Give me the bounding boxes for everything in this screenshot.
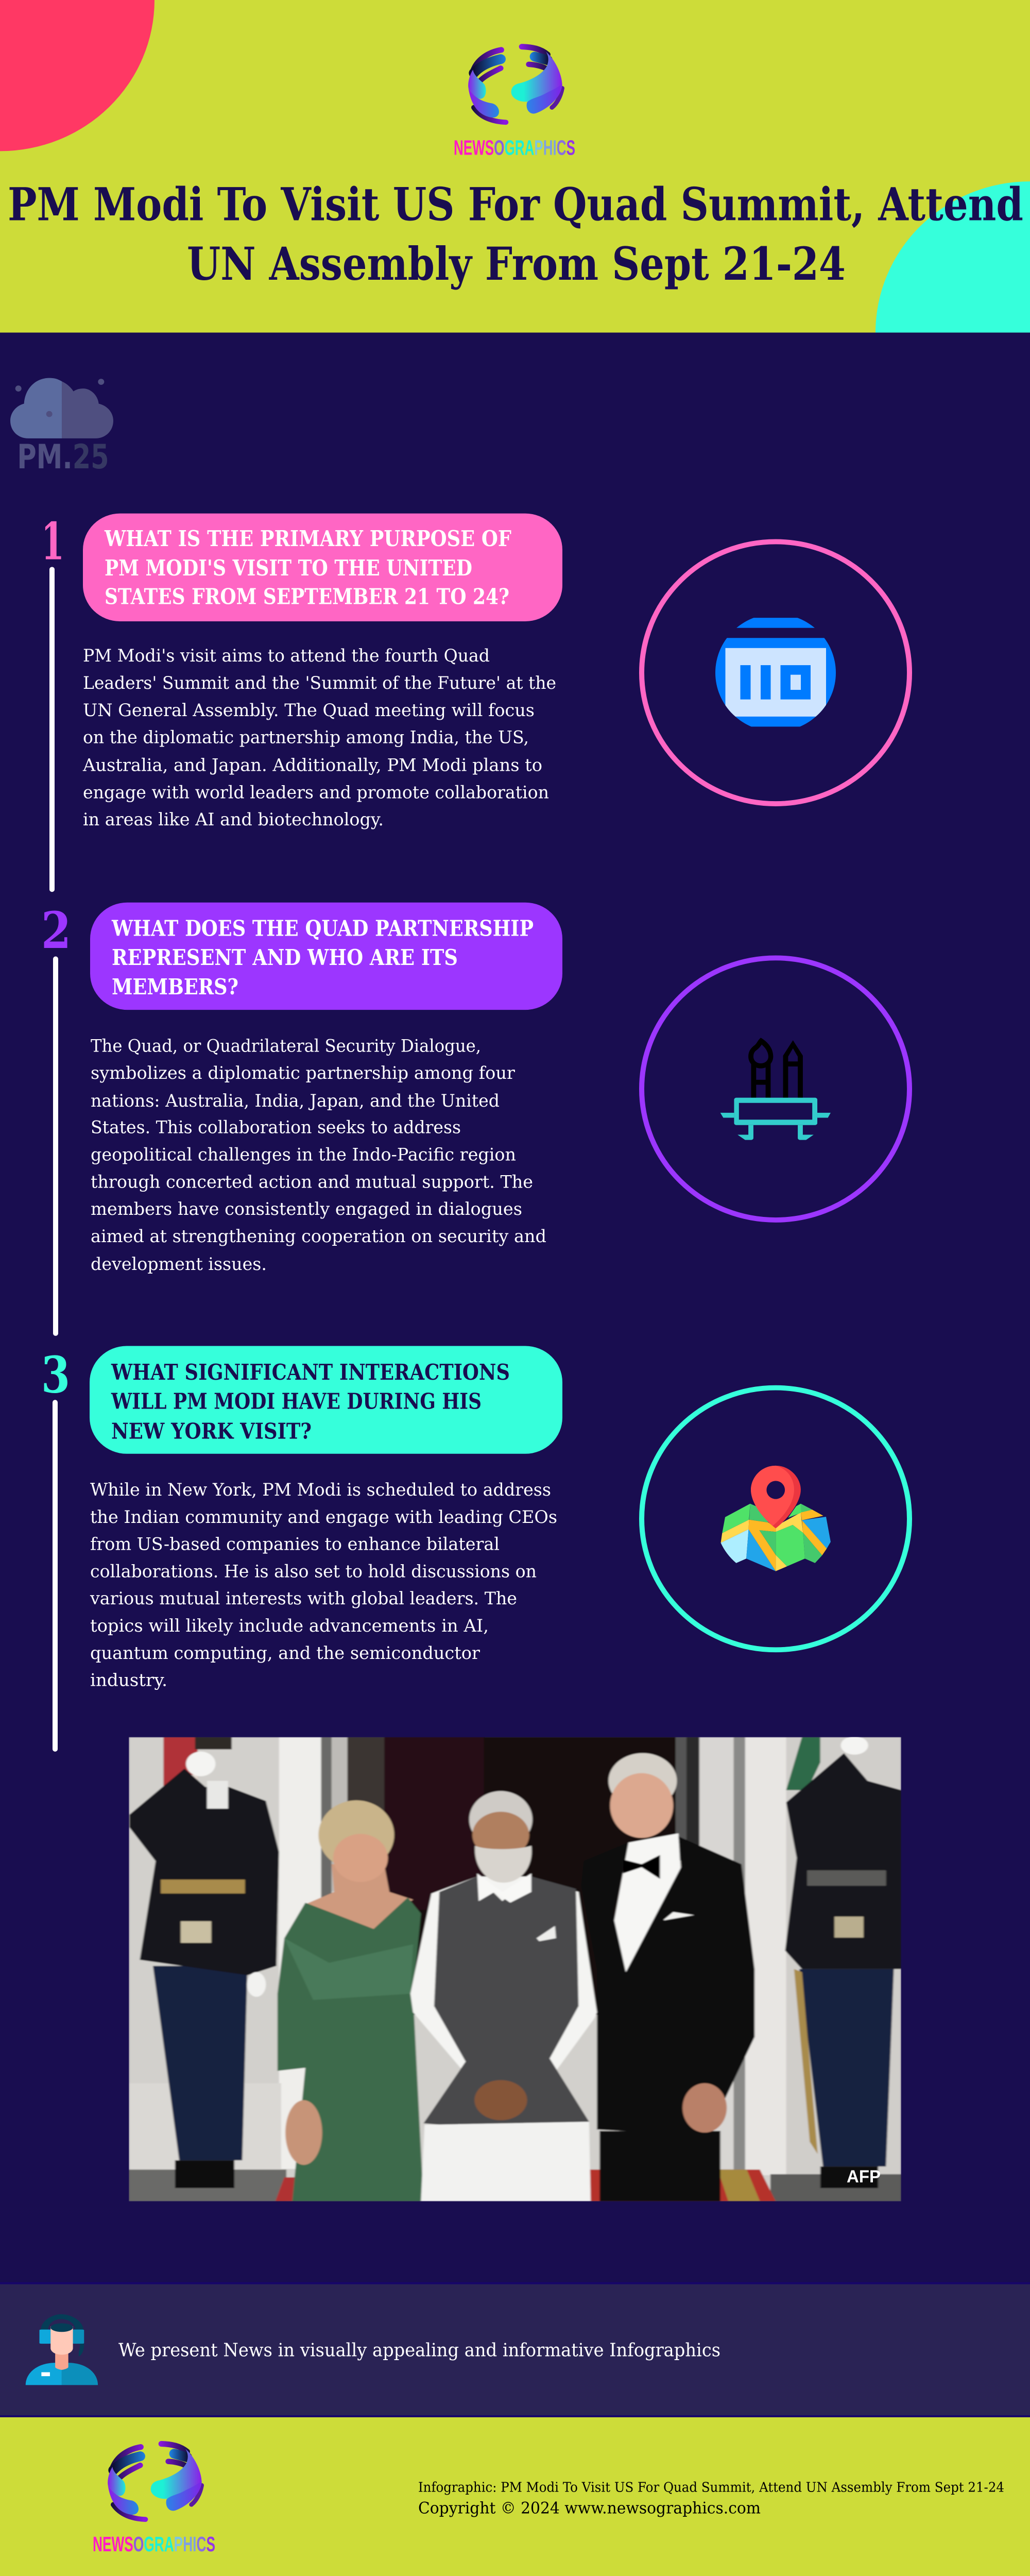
answer text 1: PM Modi's visit aims to attend the fourth Quad: [83, 646, 490, 666]
answer text 2: The Quad, or Quadrilateral Security Dialogue,: [91, 1036, 481, 1056]
answer text 2: development issues.: [91, 1254, 267, 1274]
title: [8, 177, 1023, 291]
question pill 1: STATES FROM SEPTEMBER 21 TO 24?: [105, 584, 509, 610]
answer text 2: members have consistently engaged in dialogues: [91, 1199, 522, 1219]
answer text 3: various mutual interests with global leaders. The: [90, 1589, 517, 1608]
answer text 3: quantum computing, and the semiconductor: [90, 1643, 480, 1663]
answer text 2: aimed at strengthening cooperation on security and: [91, 1226, 546, 1246]
header logo: [454, 47, 575, 159]
answer text 2: geopolitical challenges in the Indo-Pacific region: [91, 1145, 516, 1164]
question pill 3: WHAT SIGNIFICANT INTERACTIONS: [111, 1360, 510, 1385]
panel: question 3: [41, 1345, 909, 1752]
icon: map with location pin: [721, 1466, 831, 1571]
answer text 2: [91, 1036, 546, 1274]
icon: PM2.5 cloud: PM.25: [17, 437, 109, 477]
answer text 1: engage with world leaders and promote collaboration: [83, 783, 549, 802]
prime minister: [410, 1876, 597, 2094]
header panel: [0, 0, 1030, 333]
icon circle 2: [642, 958, 909, 1220]
number 1: 1: [41, 511, 64, 571]
answer text 3: from US-based companies to enhance bilateral: [90, 1534, 500, 1554]
photo credit: AFP: [847, 2167, 881, 2187]
answer text 3: While in New York, PM Modi is scheduled to address: [90, 1480, 551, 1500]
title: UN Assembly From Sept 21-24: [187, 237, 846, 291]
answer text 3: [90, 1480, 557, 1690]
footer logo: [93, 2444, 215, 2556]
footer panel: [0, 2417, 1030, 2576]
panel: question 2: [41, 901, 909, 1336]
cyan corner circle: [876, 181, 1030, 333]
icon: person with headset: [26, 2314, 98, 2385]
panel: question 1: [41, 511, 909, 892]
footer credits: [418, 2480, 1004, 2518]
question pill 1: [83, 514, 562, 621]
pink corner circle: [0, 0, 154, 151]
first lady: [318, 1800, 394, 1869]
answer text 3: industry.: [90, 1670, 167, 1690]
icon: brushes on a table: [720, 1038, 831, 1140]
number 3: 3: [41, 1345, 70, 1404]
header logo: NEWSOGRAPHICS: [454, 135, 575, 159]
answer text 1: on the diplomatic partnership among India, the US,: [83, 727, 529, 748]
question pill 1: WHAT IS THE PRIMARY PURPOSE OF: [104, 527, 511, 552]
question pill 3: NEW YORK VISIT?: [111, 1419, 312, 1444]
icon: blue window: [715, 618, 836, 726]
answer text 1: Leaders' Summit and the 'Summit of the Future' at the: [83, 673, 556, 693]
right guard: [786, 1737, 820, 1790]
answer text 1: in areas like AI and biotechnology.: [83, 809, 384, 829]
answer text 1: Australia, and Japan. Additionally, PM Modi plans to: [82, 755, 542, 775]
tagline text: We present News in visually appealing and informative Infographics: [118, 2340, 720, 2361]
icon circle 1: [642, 541, 909, 804]
icon circle 3: [642, 1388, 909, 1650]
icon: PM2.5 cloud: [10, 378, 113, 477]
timeline line 1: [49, 567, 55, 892]
question pill 2: WHAT DOES THE QUAD PARTNERSHIP: [111, 916, 534, 941]
question pill 2: [90, 903, 562, 1010]
footer logo: NEWSOGRAPHICS: [93, 2532, 215, 2556]
question pill 2: MEMBERS?: [112, 974, 238, 1000]
timeline line 2: [53, 956, 58, 1336]
timeline line 3: [53, 1400, 58, 1752]
answer text 2: through concerted action and mutual support. The: [91, 1172, 533, 1192]
question pill 3: [90, 1346, 562, 1454]
left guard: [162, 1737, 199, 1787]
answer text 2: symbolizes a diplomatic partnership among four: [91, 1063, 516, 1083]
answer text 3: collaborations. He is also set to hold discussions on: [90, 1562, 537, 1581]
answer text 1: [82, 646, 556, 829]
number 2: 2: [41, 901, 71, 960]
answer text 3: topics will likely include advancements in AI,: [90, 1616, 489, 1636]
footer credits: Copyright © 2024 www.newsographics.com: [418, 2499, 761, 2518]
question pill 1: PM MODI'S VISIT TO THE UNITED: [105, 555, 472, 581]
question pill 2: REPRESENT AND WHO ARE ITS: [112, 945, 458, 971]
president: [607, 1752, 678, 1796]
answer text 2: nations: Australia, India, Japan, and the United: [91, 1091, 500, 1111]
answer text 2: States. This collaboration seeks to address: [91, 1117, 461, 1138]
question pill 3: WILL PM MODI HAVE DURING HIS: [111, 1389, 482, 1415]
tagline band: [0, 2282, 1030, 2417]
answer text 3: the Indian community and engage with leading CEOs: [90, 1507, 557, 1527]
answer text 1: UN General Assembly. The Quad meeting will focus: [83, 700, 535, 720]
photo: leaders at the White House: [129, 1736, 901, 2201]
